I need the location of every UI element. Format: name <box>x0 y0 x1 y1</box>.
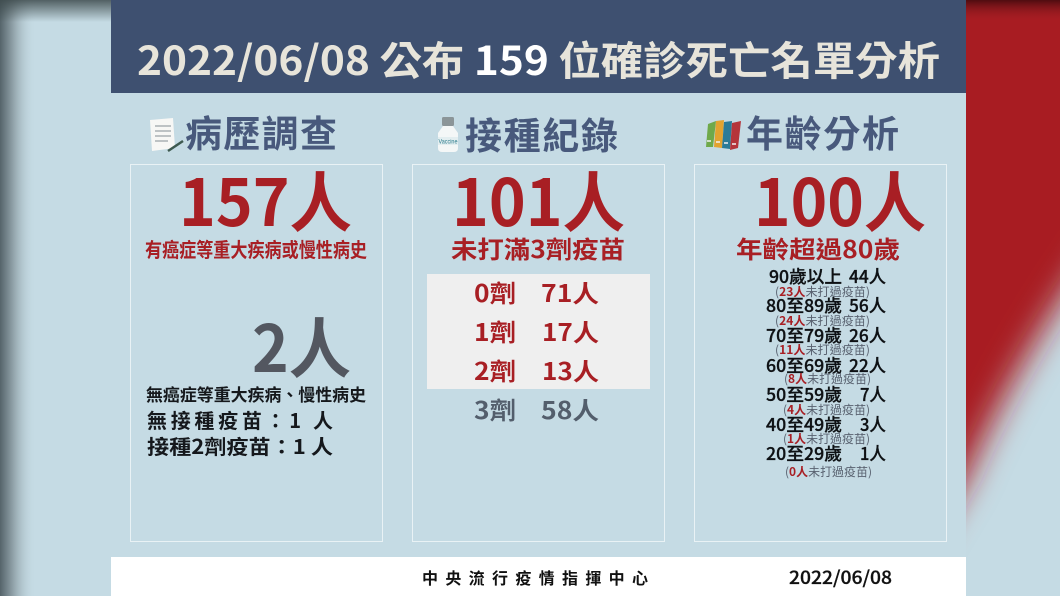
subtext 2: 無癌症等重大疾病、慢性病史 <box>146 381 366 406</box>
age breakdown list: 22人 <box>849 353 886 378</box>
dose table <box>474 274 599 426</box>
footer date: 2022/06/08 <box>789 564 892 590</box>
icon: vaccine vial <box>438 117 458 152</box>
dose table: 2劑 <box>474 352 516 387</box>
title: 2022/06/08 公布 159 位確診死亡名單分析 <box>137 29 940 87</box>
footer source: 中央流行疫情指揮中心 <box>422 565 648 589</box>
subtext 101: 未打滿3劑疫苗 <box>451 230 625 265</box>
heading: medical history: 病歷調查 <box>185 104 337 158</box>
dose table: 1劑 <box>474 313 516 348</box>
panel: age <box>694 104 946 542</box>
dose table: 17人 <box>542 313 599 348</box>
age breakdown list: (11人未打過疫苗) <box>775 341 870 358</box>
age breakdown list <box>766 264 886 480</box>
dose table: 58人 <box>541 391 599 426</box>
footer bar <box>111 557 966 596</box>
note unvaccinated: 無接種疫苗：1 人 <box>147 405 333 434</box>
age breakdown list: 90歲以上 <box>769 264 842 289</box>
age breakdown list: 56人 <box>849 293 886 318</box>
panel: medical history <box>130 104 382 542</box>
dose table: 0劑 <box>474 274 516 309</box>
red corner shape <box>966 0 1060 532</box>
icon: books <box>706 120 741 150</box>
subtext 157: 有癌症等重大疾病或慢性病史 <box>145 234 367 263</box>
age breakdown list: (0人未打過疫苗) <box>785 463 872 480</box>
dose table: 13人 <box>542 352 599 387</box>
heading: vaccination: 接種紀錄 <box>465 106 618 160</box>
age breakdown list: (4人未打過疫苗) <box>783 401 870 418</box>
icon: vaccine vial: Vaccine <box>438 140 458 146</box>
panel: vaccination <box>412 106 664 542</box>
age breakdown list: 20至29歲 <box>766 441 842 466</box>
age breakdown list: (8人未打過疫苗) <box>784 370 871 387</box>
age breakdown list: 80至89歲 <box>766 293 842 318</box>
age breakdown list: 70至79歲 <box>766 323 842 348</box>
big number 101: 101人 <box>452 151 625 245</box>
big number 2: 2人 <box>252 297 351 391</box>
age breakdown list: 40至49歲 <box>766 412 842 437</box>
big number 157: 157人 <box>179 151 352 245</box>
age breakdown list: 60至69歲 <box>766 353 842 378</box>
age breakdown list: (24人未打過疫苗) <box>775 312 870 329</box>
dose highlight box <box>427 274 650 389</box>
age breakdown list: (1人未打過疫苗) <box>783 430 870 447</box>
age breakdown list: 44人 <box>849 264 886 289</box>
heading: age: 年齡分析 <box>746 104 899 158</box>
age breakdown list: 1人 <box>860 441 886 466</box>
age breakdown list: 3人 <box>860 412 886 437</box>
age breakdown list: 50至59歲 <box>766 382 842 407</box>
age breakdown list: 7人 <box>860 382 886 407</box>
dose table: 3劑 <box>474 391 516 426</box>
age breakdown list: 26人 <box>849 323 886 348</box>
icon: document and pen <box>150 118 183 151</box>
title bar <box>111 0 966 93</box>
dose table: 71人 <box>541 274 599 309</box>
big number 100: 100人 <box>754 151 926 245</box>
age breakdown list: (23人未打過疫苗) <box>775 283 870 300</box>
subtext 100: 年齡超過80歲 <box>736 230 900 265</box>
note two doses: 接種2劑疫苗：1 人 <box>147 431 333 460</box>
